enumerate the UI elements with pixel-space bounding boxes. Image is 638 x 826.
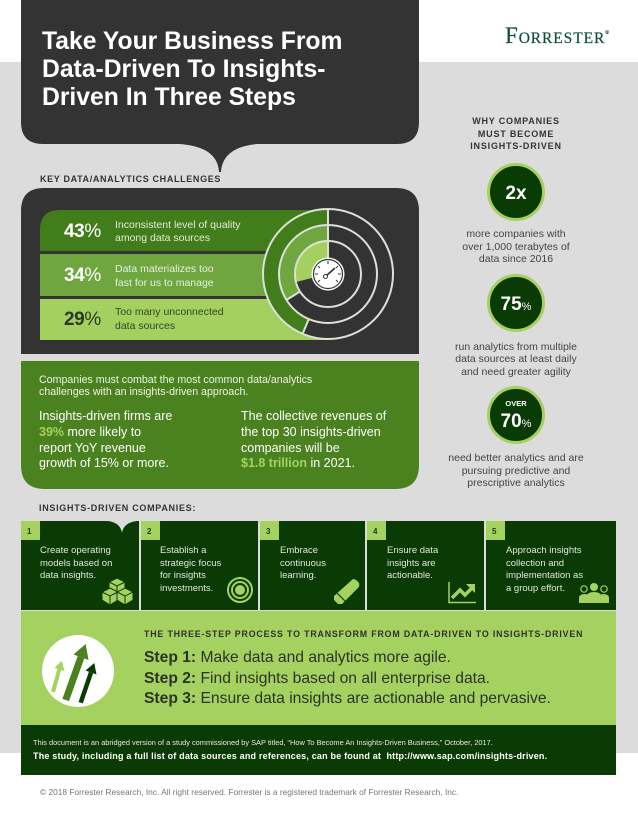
stat: $1.8 trillion: $1.8 trillion xyxy=(241,456,307,470)
card 4: actionable: actionable. xyxy=(387,570,433,581)
stat: over 70%: pursuing predictive and xyxy=(462,465,570,477)
steps: Make data and analytics more agile. xyxy=(196,649,451,666)
stat: $1.8 trillion: The collective revenues of xyxy=(241,409,387,423)
source footer band xyxy=(21,725,616,775)
steps: Step 2: xyxy=(144,670,196,687)
card 3: continuous learning xyxy=(260,521,365,610)
card 5: group effort xyxy=(486,521,616,610)
icon: cubes xyxy=(102,578,133,605)
steps: Step 1: xyxy=(144,649,196,666)
title: Data-Driven To Insights- xyxy=(42,56,325,83)
stat: over 70% xyxy=(448,388,584,489)
panel: insights-driven approach xyxy=(21,361,419,489)
card 5: group effort: implementation as xyxy=(506,570,583,581)
stat: 75%: and need greater agility xyxy=(461,366,572,378)
card 3: continuous learning: continuous xyxy=(280,558,326,569)
Forrester logo: ® xyxy=(605,30,609,36)
card 5: group effort: collection and xyxy=(506,558,564,569)
icon: target xyxy=(228,578,252,602)
heading: key challenges: KEY DATA/ANALYTICS CHALLENGES xyxy=(40,174,221,184)
card 5: group effort: a group effort. xyxy=(506,583,565,594)
icon: rising arrows xyxy=(42,635,114,707)
card 2: strategic focus: investments. xyxy=(160,583,213,594)
stat: 2x xyxy=(462,164,570,265)
card 1: operating models: Create operating xyxy=(40,545,111,556)
stat: 75% xyxy=(455,276,577,378)
card 4: actionable: Ensure data xyxy=(387,545,439,556)
bar: 29%: Too many unconnected xyxy=(115,306,224,318)
radial chart with gauge icon xyxy=(263,209,393,339)
panel: insights-driven approach: challenges with an insights-driven approach. xyxy=(39,386,248,398)
card 1: operating models: 1 xyxy=(27,527,32,536)
stat: 39% more likely: report YoY revenue xyxy=(39,441,146,455)
icon: pencil xyxy=(334,579,359,604)
card 2: strategic focus: 2 xyxy=(147,527,152,536)
heading: why companies: WHY COMPANIES xyxy=(472,116,560,126)
stat: over 70%: prescriptive analytics xyxy=(467,477,565,489)
heading: why companies: INSIGHTS-DRIVEN xyxy=(470,141,562,151)
copyright: © 2018 Forrester Research, Inc. All right reserved. Forrester is a registered trademark of Forrester Research, Inc. xyxy=(40,787,458,797)
title: Driven In Three Steps xyxy=(42,84,296,111)
card 5: group effort: 5 xyxy=(492,527,497,536)
stat: over 70%: need better analytics and are xyxy=(448,452,584,464)
bar: 34% xyxy=(40,254,330,296)
card 4: actionable: insights are xyxy=(387,558,436,569)
icon: line chart xyxy=(449,582,476,602)
card 2: strategic focus: strategic focus xyxy=(160,558,221,569)
steps: Ensure data insights are actionable and pervasive. xyxy=(196,690,551,707)
bar: 43%: 43% xyxy=(64,221,101,242)
card 1: operating models xyxy=(21,521,139,610)
card 5: group effort: Approach insights xyxy=(506,545,582,556)
heading: three-step process: THE THREE-STEP PROCESS TO TRANSFORM FROM DATA-DRIVEN TO INSIGHTS-DRIVEN xyxy=(144,629,583,639)
card 3: continuous learning: Embrace xyxy=(280,545,318,556)
card 2: strategic focus: for insights xyxy=(160,570,206,581)
heading: why companies: MUST BECOME xyxy=(478,129,554,139)
card 3: continuous learning: 3 xyxy=(266,527,271,536)
stat: 75%: run analytics from multiple xyxy=(455,341,577,353)
header panel with title xyxy=(21,0,419,172)
card 4: actionable: 4 xyxy=(373,527,378,536)
card 2: strategic focus xyxy=(141,521,258,610)
Forrester logo: FORRESTER xyxy=(505,23,604,48)
steps: Step 3: xyxy=(144,690,196,707)
source footer band: The study, including a full list of data sources and references, can be found at http://www.sap.com/insights-driven. xyxy=(33,751,547,761)
stat: $1.8 trillion: the top 30 insights-driven xyxy=(241,425,381,439)
bar: 43%: Inconsistent level of quality xyxy=(115,219,241,231)
bar: 34%: 34% xyxy=(64,265,101,286)
heading: insights-driven companies: INSIGHTS-DRIVEN COMPANIES: xyxy=(39,503,196,513)
stat: $1.8 trillion: in 2021. xyxy=(307,456,355,470)
panel: insights-driven approach: Companies must combat the most common data/analytics xyxy=(39,374,312,386)
stat: 2x: over 1,000 terabytes of xyxy=(462,241,570,253)
card 3: continuous learning: learning. xyxy=(280,570,316,581)
bar: 34%: Data materializes too xyxy=(115,263,214,275)
stat: over 70%: OVER xyxy=(505,399,527,408)
source footer band: This document is an abridged version of a study commissioned by SAP titled, “How To Become An Insights-Driven Business,” October, 2017. xyxy=(33,738,493,747)
stat: 39% more likely: Insights-driven firms are xyxy=(39,409,172,423)
stat: 2x: 2x xyxy=(505,183,527,204)
stat: 2x: more companies with xyxy=(466,228,566,240)
stat: 39% more likely: 39% xyxy=(39,425,64,439)
panel: three-step process xyxy=(21,611,616,725)
stat: over 70%: 70% xyxy=(501,411,532,432)
stat: 75%: 75% xyxy=(501,294,532,315)
stat: 39% more likely: growth of 15% or more. xyxy=(39,456,169,470)
card 1: operating models: models based on xyxy=(40,558,112,569)
card 2: strategic focus: Establish a xyxy=(160,545,207,556)
steps: Find insights based on all enterprise data. xyxy=(196,670,490,687)
card 1: operating models: data insights. xyxy=(40,570,96,581)
bar: 43%: among data sources xyxy=(115,232,210,244)
icon: gauge xyxy=(312,258,344,290)
panel: challenges xyxy=(21,188,419,354)
icon: people xyxy=(579,583,609,603)
bar: 34%: fast for us to manage xyxy=(115,277,214,289)
bar: 29%: 29% xyxy=(64,309,101,330)
stat: 75%: data sources at least daily xyxy=(455,353,577,365)
stat: $1.8 trillion: companies will be xyxy=(241,441,340,455)
stat: 2x: data since 2016 xyxy=(479,253,553,265)
bar: 43% xyxy=(40,210,330,251)
title: Take Your Business From xyxy=(42,28,342,55)
stat: 39% more likely: more likely to xyxy=(64,425,141,439)
bar: 29% xyxy=(40,299,330,340)
card 4: actionable xyxy=(367,521,484,610)
bar: 29%: data sources xyxy=(115,320,175,332)
